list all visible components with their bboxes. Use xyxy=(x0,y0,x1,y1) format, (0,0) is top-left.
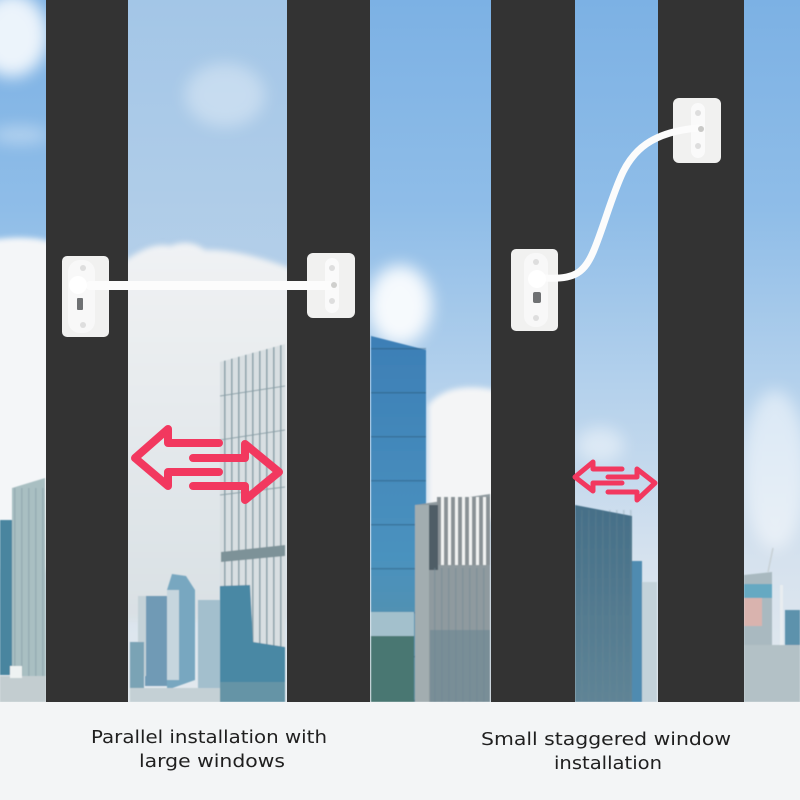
lattice tower xyxy=(220,344,285,702)
arrow: large gap double arrow xyxy=(135,429,279,500)
left lock knob xyxy=(69,276,87,294)
straight cable xyxy=(86,281,334,290)
dark tower in right gap xyxy=(575,505,632,702)
lower lock plate xyxy=(511,249,558,331)
caption: staggered installation second line: installation xyxy=(554,753,662,774)
middle distant towers xyxy=(145,596,167,686)
frame 3 xyxy=(491,0,575,702)
paler sky in the left gap xyxy=(128,0,288,280)
lower lock knob xyxy=(528,270,546,288)
crisp cumulus bank: left edge xyxy=(0,238,60,570)
far right towers xyxy=(744,572,772,702)
lock set: parallel installation xyxy=(62,253,355,337)
upper lock pin xyxy=(698,126,704,132)
striped tower xyxy=(415,494,490,702)
lock set: staggered installation xyxy=(511,98,721,331)
far left towers xyxy=(0,520,12,675)
window frames xyxy=(46,0,744,702)
left lock plate xyxy=(62,256,109,337)
cumulus behind striped tower xyxy=(428,387,505,520)
crisp cumulus bank: left gap xyxy=(115,243,300,620)
frame 2 xyxy=(287,0,370,702)
arrow: small gap double arrow xyxy=(575,462,655,500)
curved cable xyxy=(545,128,698,278)
right lock plate xyxy=(307,253,355,318)
caption: parallel installation second line: large windows xyxy=(139,751,285,772)
caption: parallel installation: Parallel installation with xyxy=(91,727,327,748)
upper lock plate xyxy=(673,98,721,163)
city skyline xyxy=(0,336,800,702)
blue glass tower xyxy=(371,336,426,702)
right lock pin xyxy=(331,282,337,288)
clouds xyxy=(0,0,800,550)
frame 1 xyxy=(46,0,128,702)
caption: staggered installation: Small staggered window xyxy=(481,729,731,750)
bottom caption band xyxy=(0,702,800,800)
frame 4 xyxy=(658,0,744,702)
